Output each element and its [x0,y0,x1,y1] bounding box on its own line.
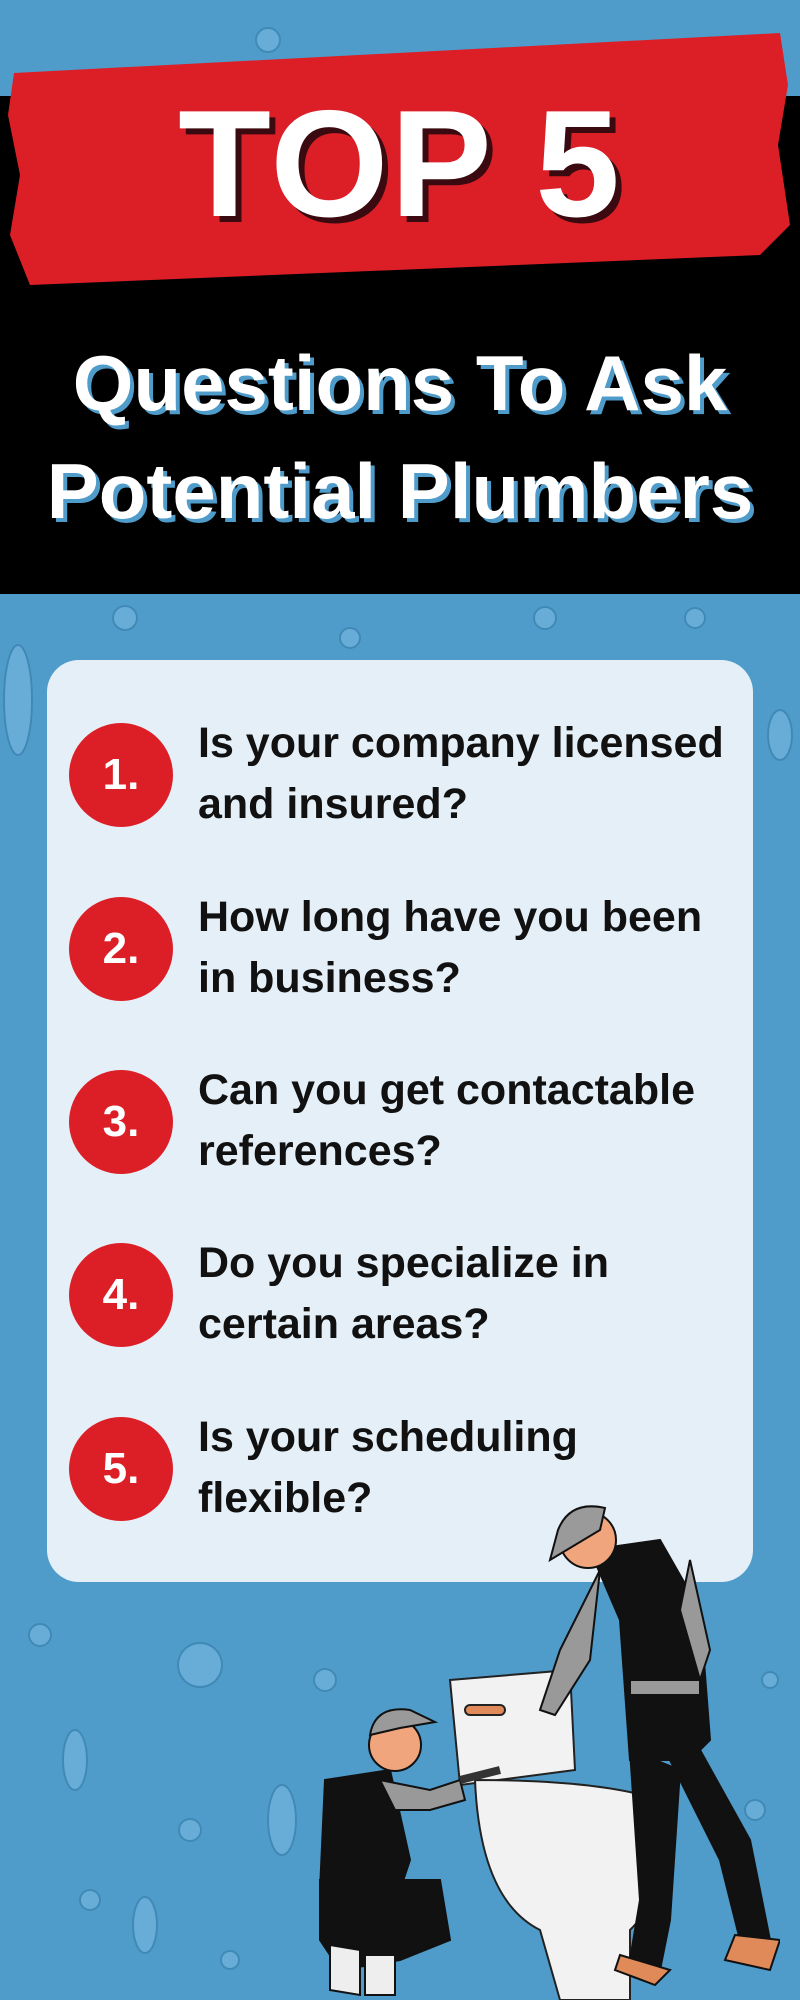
red banner [8,33,790,285]
question 5: 5. [103,1444,139,1493]
question 5 [69,1413,578,1522]
question 1: and insured? [198,780,468,828]
question 5: Is your scheduling [198,1413,578,1461]
illustration: plumbers fixing toilet [318,1505,780,2000]
question 1: 1. [103,750,139,799]
question 3 [69,1066,695,1175]
question 3: references? [198,1127,442,1175]
question 4: Do you specialize in [198,1239,609,1287]
question 4: 4. [103,1270,139,1319]
question 2: in business? [198,954,461,1002]
question 5: flexible? [198,1474,372,1522]
question 1: Is your company licensed [198,719,724,767]
subtitle: Potential Plumbers [47,447,753,535]
question 2: How long have you been [198,893,702,941]
title: TOP 5: TOP 5 [178,79,622,249]
subtitle [47,339,754,535]
question 4: certain areas? [198,1300,490,1348]
toilet [450,1670,666,2000]
question 4 [69,1239,609,1348]
standing plumber [540,1506,780,1985]
question 3: 3. [103,1097,139,1146]
question 1 [69,719,724,828]
crouching plumber [320,1709,500,1995]
question 2: 2. [103,924,139,973]
question 2 [69,893,702,1002]
question 3: Can you get contactable [198,1066,695,1114]
black header band [0,96,800,594]
panel: questions card [47,660,753,1582]
subtitle: Questions To Ask [73,339,727,427]
